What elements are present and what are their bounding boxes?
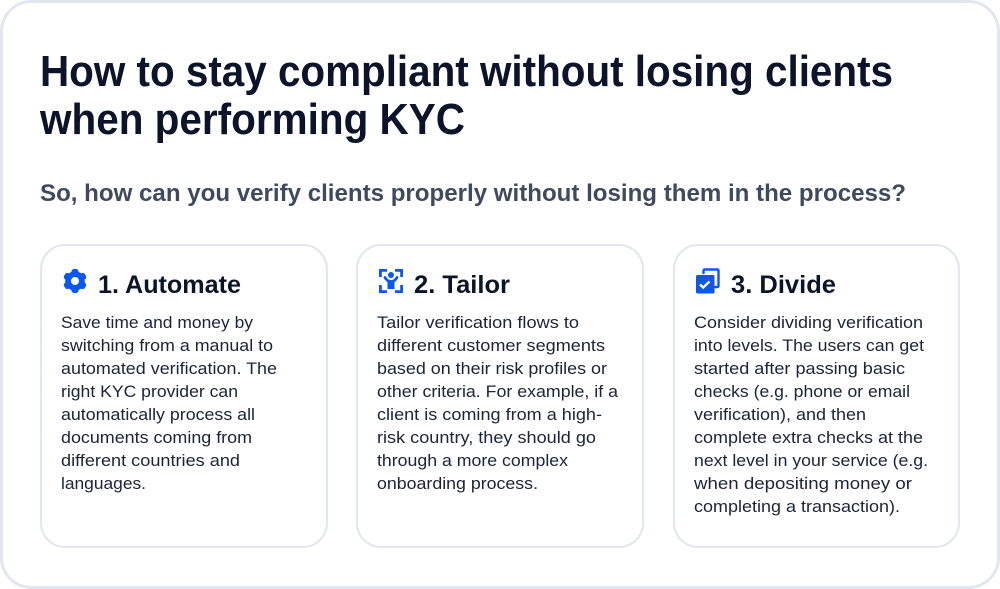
- body text: [377, 314, 619, 493]
- body text: automatically process all: [61, 406, 255, 424]
- heading: 1. Automate: [98, 271, 241, 299]
- icon: person in frame: [380, 270, 402, 292]
- title: when performing KYC: [39, 95, 465, 144]
- icon: gear: [63, 269, 87, 293]
- card background: [674, 245, 959, 547]
- body text: [693, 314, 928, 516]
- body text: different customer segments: [377, 337, 605, 355]
- body text: through a more complex: [377, 452, 569, 470]
- body text: other criteria. For example, if a: [377, 383, 619, 401]
- body text: [61, 314, 277, 493]
- body text: verification), and then: [694, 406, 866, 424]
- body text: onboarding process.: [377, 475, 538, 493]
- title: [39, 47, 893, 144]
- body text: documents coming from: [61, 429, 252, 447]
- panel: automate: [41, 245, 327, 547]
- body text: when depositing money or: [693, 475, 913, 493]
- body text: checks (e.g. phone or email: [694, 383, 910, 401]
- body text: right KYC provider can: [61, 383, 238, 401]
- body text: Save time and money by: [61, 314, 254, 332]
- body text: languages.: [61, 475, 146, 493]
- body text: completing a transaction).: [694, 498, 900, 516]
- icon: stacked check boxes: [696, 270, 718, 294]
- body text: Consider dividing verification: [694, 314, 923, 332]
- panel: tailor: [357, 245, 643, 547]
- body text: next level in your service (e.g.: [694, 452, 928, 470]
- body text: based on their risk profiles or: [377, 360, 608, 378]
- title: How to stay compliant without losing clients: [40, 47, 893, 96]
- body text: switching from a manual to: [61, 337, 273, 355]
- body text: into levels. The users can get: [694, 337, 924, 355]
- heading: 2. Tailor: [414, 271, 510, 299]
- body text: client is coming from a high-: [377, 406, 602, 424]
- body text: complete extra checks at the: [694, 429, 923, 447]
- body text: started after passing basic: [694, 360, 905, 378]
- body text: Tailor verification flows to: [377, 314, 579, 332]
- card background: [357, 245, 643, 547]
- body text: risk country, they should go: [377, 429, 596, 447]
- body text: automated verification. The: [61, 360, 277, 378]
- card background: [41, 245, 327, 547]
- subtitle: So, how can you verify clients properly without losing them in the process?: [40, 180, 906, 207]
- panel: divide: [674, 245, 959, 547]
- body text: different countries and: [61, 452, 240, 470]
- heading: 3. Divide: [731, 271, 836, 299]
